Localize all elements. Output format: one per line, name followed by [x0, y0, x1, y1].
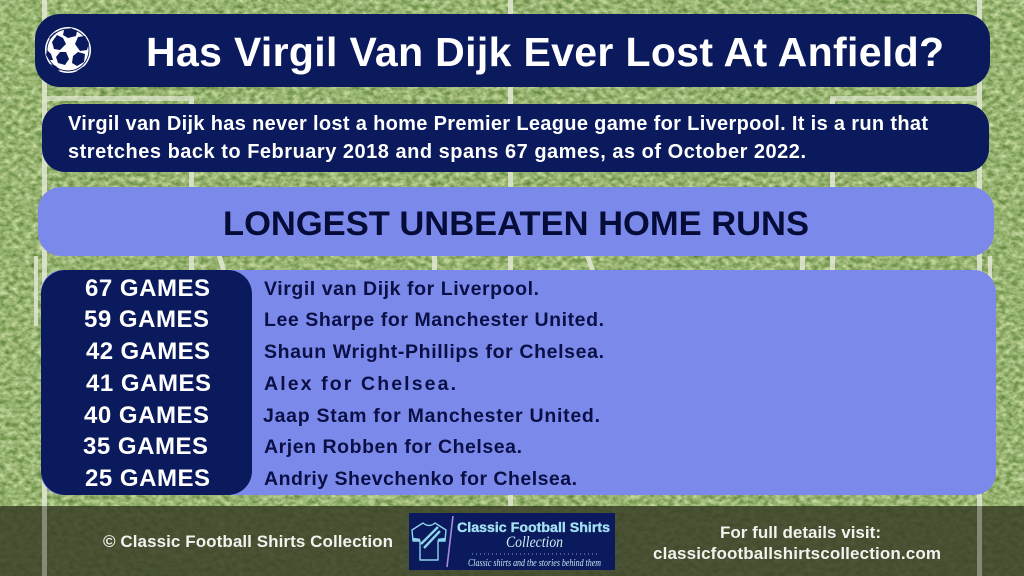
logo collection: Collection: [506, 534, 563, 551]
player names column: Shaun Wright-Phillips for Chelsea.: [264, 341, 604, 363]
player names column: [263, 278, 604, 490]
intro text panel: [42, 104, 989, 172]
footer band: [0, 506, 1024, 576]
player names column: Arjen Robben for Chelsea.: [264, 436, 522, 458]
footer details: For full details visit:: [720, 523, 881, 542]
logo: Classic Football Shirts Collection: [409, 513, 615, 570]
intro line 2: stretches back to February 2018 and spans 67 games, as of October 2022.: [68, 141, 806, 163]
player names column: Jaap Stam for Manchester United.: [263, 405, 600, 427]
logo divider: [447, 516, 453, 567]
games column: 25 GAMES: [85, 465, 210, 492]
footer details: classicfootballshirtscollection.com: [653, 544, 941, 563]
games column: 41 GAMES: [86, 370, 211, 397]
title panel: [35, 14, 990, 87]
panel: unbeaten runs list: [41, 270, 996, 495]
title text: Has Virgil Van Dijk Ever Lost At Anfield?: [146, 29, 944, 75]
icon: football shirt: [412, 523, 446, 560]
logo name: Classic Football Shirts: [457, 519, 610, 535]
player names column: Andriy Shevchenko for Chelsea.: [264, 468, 577, 490]
icon: football: [45, 27, 91, 73]
heading text: LONGEST UNBEATEN HOME RUNS: [223, 205, 809, 243]
heading panel: [38, 187, 994, 256]
player names column: Lee Sharpe for Manchester United.: [264, 309, 604, 331]
intro line 1: Virgil van Dijk has never lost a home Premier League game for Liverpool. It is a run that: [68, 113, 928, 135]
footer details: [653, 523, 941, 563]
games column: 67 GAMES: [85, 275, 210, 302]
player names column: Virgil van Dijk for Liverpool.: [264, 278, 539, 300]
player names column: Alex for Chelsea.: [264, 373, 456, 395]
logo tagline: Classic shirts and the stories behind them: [468, 558, 601, 569]
logo dots: [472, 553, 600, 555]
games column: 40 GAMES: [84, 402, 209, 429]
games column: 35 GAMES: [83, 433, 208, 460]
games column: [41, 270, 252, 495]
games column: 42 GAMES: [86, 338, 210, 365]
games column: 59 GAMES: [84, 306, 209, 333]
footer copyright: © Classic Football Shirts Collection: [103, 532, 393, 551]
